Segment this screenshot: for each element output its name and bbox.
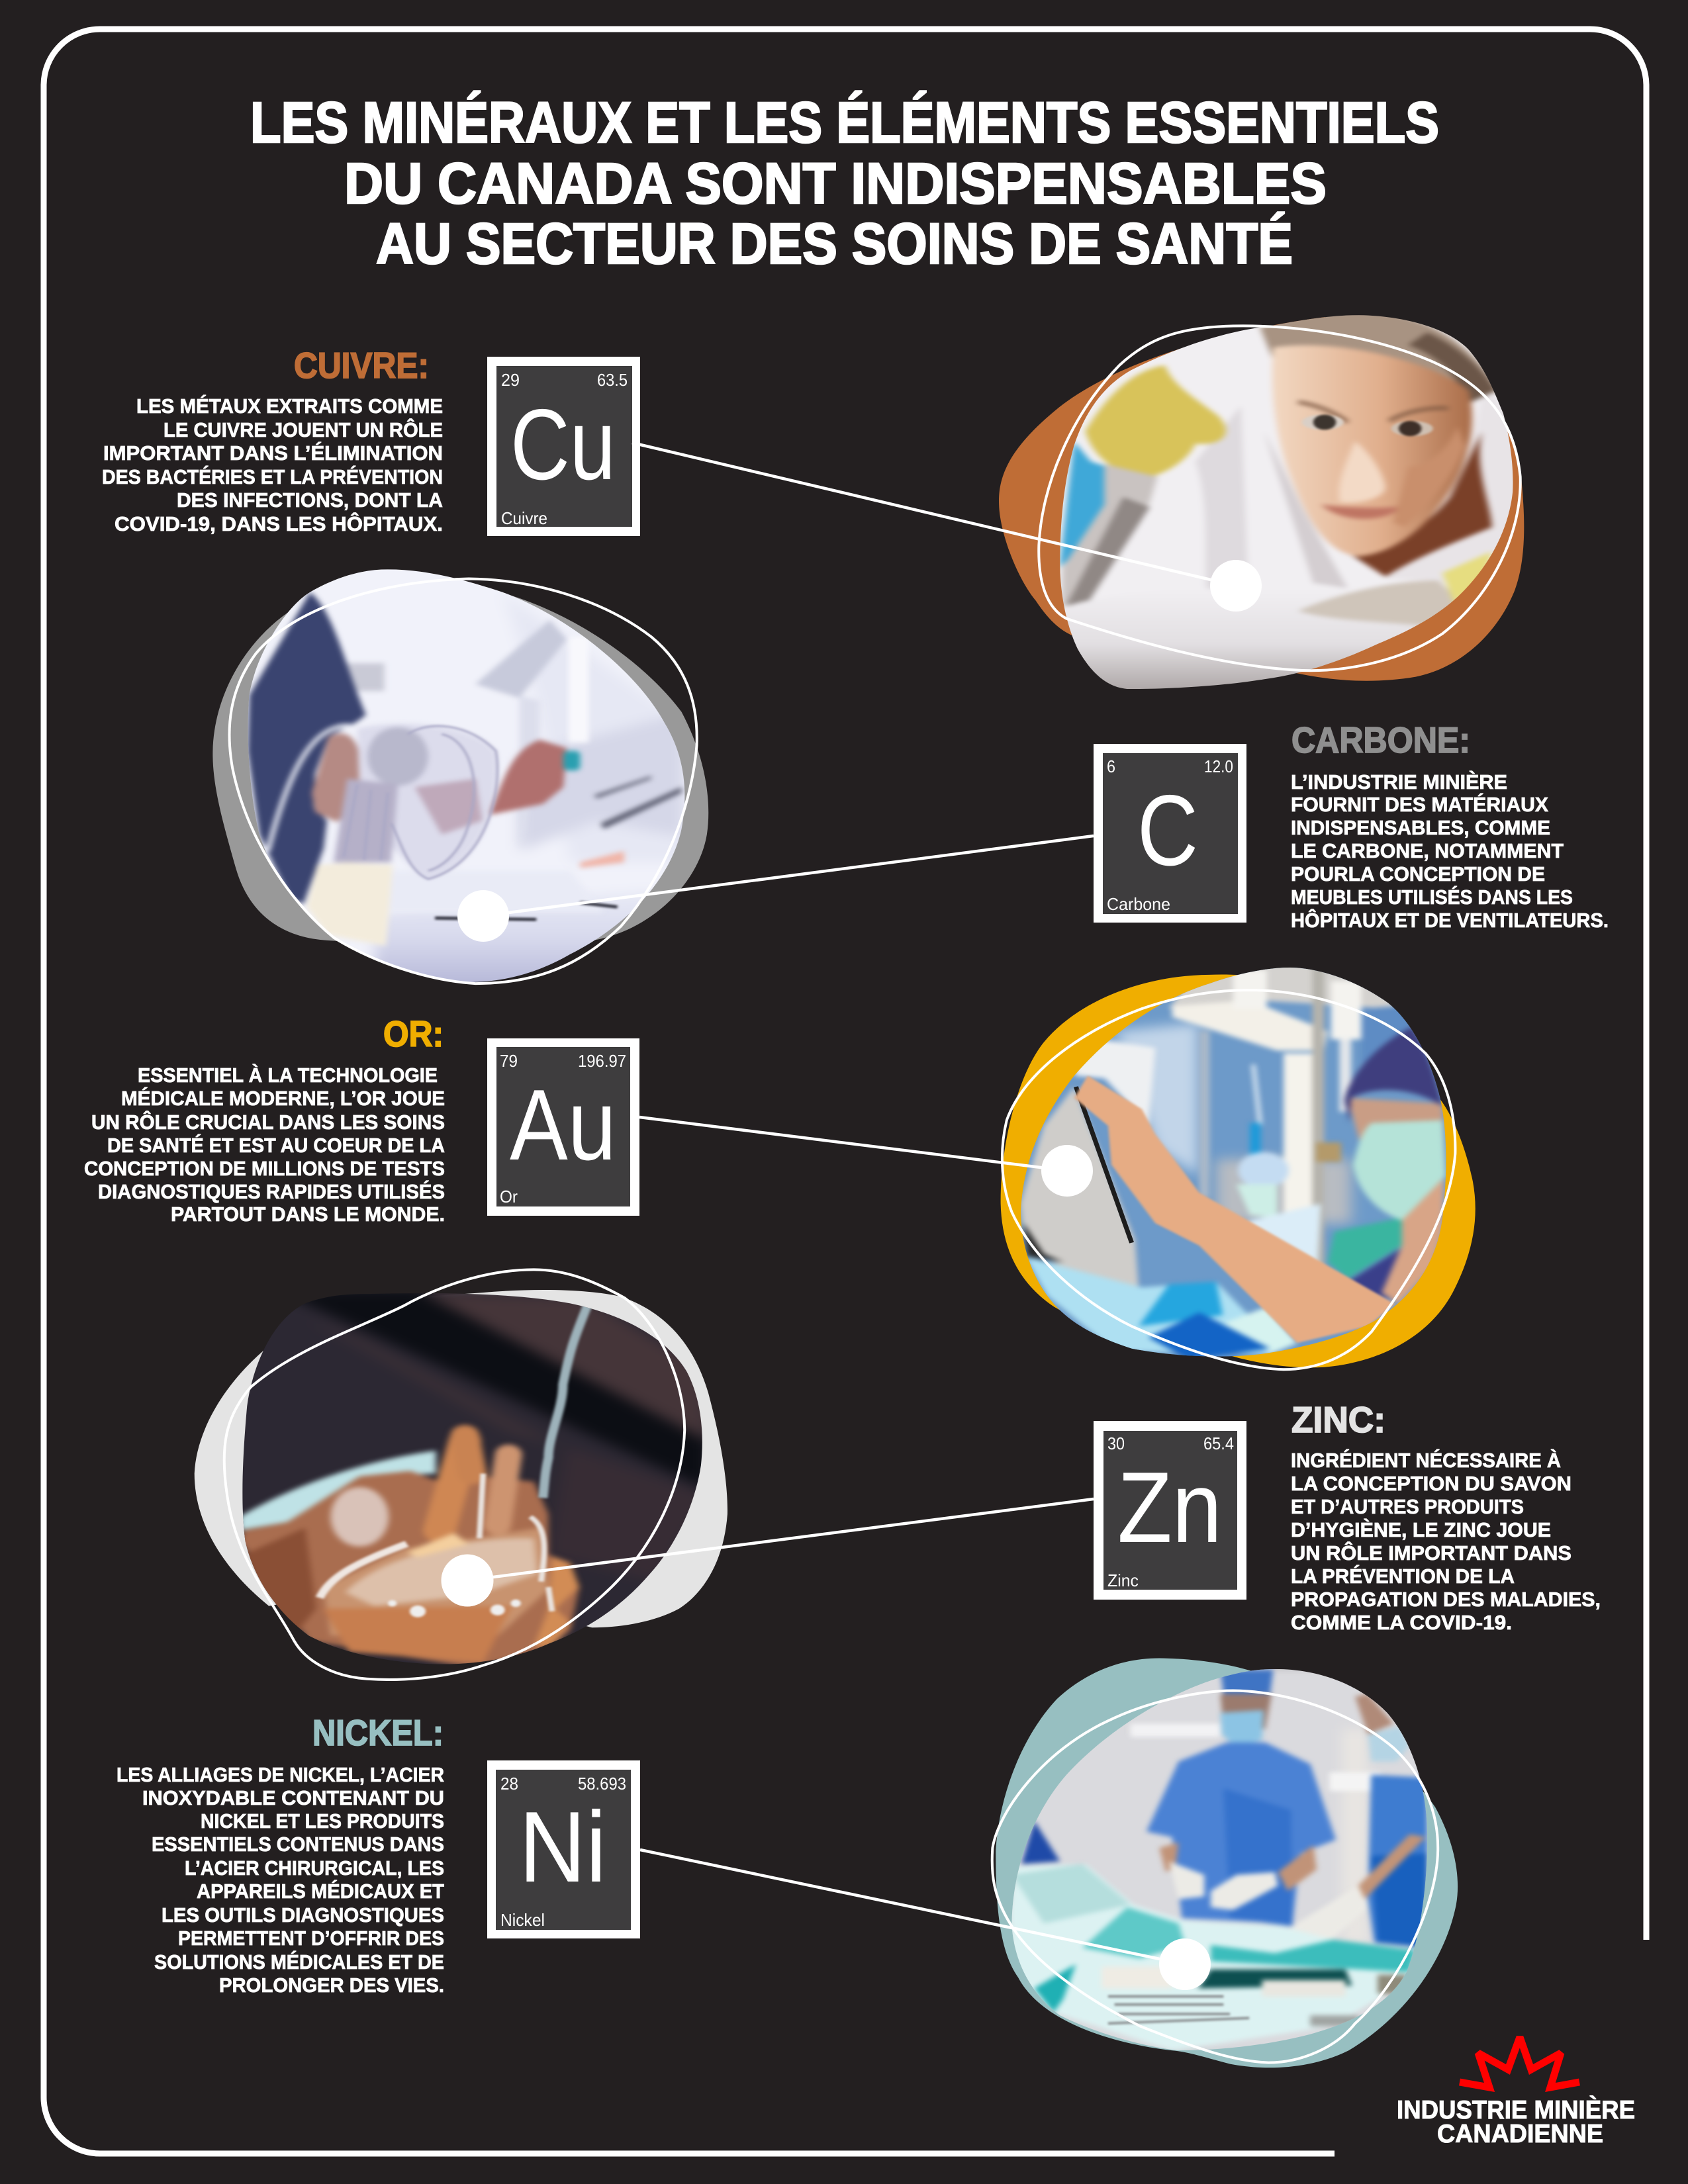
element tile: C: 6 — [1107, 756, 1115, 776]
heading: cuivre: CUIVRE: — [294, 345, 429, 386]
logo wordmark: INDUSTRIE MINIÈRE — [1397, 2095, 1635, 2124]
heading: carbone: CARBONE: — [1291, 719, 1470, 760]
element tile: Ni: 58.693 — [578, 1774, 626, 1794]
text block: zinc: LA CONCEPTION DU SAVON — [1291, 1473, 1571, 1495]
element tile: Zn: 65.4 — [1203, 1433, 1234, 1453]
text block: nickel: PROLONGER DES VIES. — [219, 1974, 444, 1997]
connector: Cu to photo — [632, 443, 1262, 612]
element tile: Cu: 29 — [501, 370, 520, 390]
text block: or — [84, 1064, 445, 1226]
element tile: Cu: Cu — [510, 388, 616, 501]
text block: cuivre: DES INFECTIONS, DONT LA — [177, 489, 443, 512]
text block: carbone: L’INDUSTRIE MINIÈRE — [1291, 770, 1507, 794]
text block: nickel: LES ALLIAGES DE NICKEL, L’ACIER — [117, 1764, 444, 1786]
element tile: Cu: 63.5 — [597, 370, 628, 390]
title — [250, 91, 1439, 276]
panel: copper photo blob — [999, 304, 1530, 700]
text block: carbone: POURLA CONCEPTION DE — [1291, 863, 1545, 886]
text block: zinc: INGRÉDIENT NÉCESSAIRE À — [1291, 1449, 1561, 1472]
text block: cuivre: COVID-19, DANS LES HÔPITAUX. — [115, 512, 443, 535]
text block: cuivre — [102, 394, 443, 535]
text block: or: DE SANTÉ ET EST AU COEUR DE LA — [107, 1134, 445, 1157]
heading: nickel: NICKEL: — [312, 1712, 444, 1753]
panel: cuivre text — [102, 345, 443, 535]
element tile: Au: 196.97 — [578, 1051, 626, 1071]
element tile: C: 12.0 — [1204, 756, 1233, 776]
element tile: Au: Au — [510, 1069, 616, 1181]
white outline shape — [229, 579, 697, 983]
title: LES MINÉRAUX ET LES ÉLÉMENTS ESSENTIELS — [250, 91, 1439, 155]
title: AU SECTEUR DES SOINS DE SANTÉ — [376, 212, 1293, 276]
text block: cuivre: LES MÉTAUX EXTRAITS COMME — [136, 394, 443, 418]
text block: zinc: UN RÔLE IMPORTANT DANS — [1291, 1541, 1571, 1565]
element tile: Cu: Cuivre — [501, 508, 547, 528]
text block: nickel: NICKEL ET LES PRODUITS — [201, 1810, 444, 1833]
text block: zinc: COMME LA COVID-19. — [1291, 1612, 1512, 1634]
white outline shape — [1039, 326, 1521, 670]
text block: nickel: L’ACIER CHIRURGICAL, LES — [185, 1857, 444, 1880]
text block: carbone: MEUBLES UTILISÉS DANS LES — [1291, 886, 1573, 909]
panel: zinc photo blob — [195, 1269, 730, 1680]
element tile: C: C — [1137, 774, 1198, 887]
text block: or: UN RÔLE CRUCIAL DANS LES SOINS — [91, 1110, 445, 1134]
white outline shape — [224, 1269, 684, 1680]
element tile: Au: Or — [500, 1187, 518, 1206]
text block: carbone — [1291, 770, 1609, 932]
light gray backing shape — [195, 1290, 727, 1627]
element tile: Ni: Nickel — [500, 1910, 545, 1930]
text block: carbone: FOURNIT DES MATÉRIAUX — [1291, 793, 1549, 816]
element tile: Au: 79 — [500, 1051, 518, 1071]
panel: or text — [84, 1013, 445, 1226]
element tile: Cu — [487, 357, 640, 536]
photo: woman cleaning surface — [1060, 315, 1513, 689]
text block: cuivre: LE CUIVRE JOUENT UN RÔLE — [164, 418, 443, 441]
text block: nickel: LES OUTILS DIAGNOSTIQUES — [162, 1904, 444, 1927]
title: DU CANADA SONT INDISPENSABLES — [344, 152, 1327, 216]
element tile: Ni: Ni — [519, 1791, 606, 1903]
panel: gold photo blob — [1001, 953, 1476, 1371]
text block: nickel: APPAREILS MÉDICAUX ET — [197, 1880, 444, 1903]
icon: red maple leaf outline — [1460, 2037, 1579, 2087]
text block: zinc: PROPAGATION DES MALADIES, — [1291, 1588, 1601, 1611]
teal backing shape — [996, 1659, 1458, 2068]
connector: C to photo — [457, 836, 1094, 942]
logo wordmark: CANADIENNE — [1437, 2120, 1603, 2148]
text block: nickel — [117, 1764, 444, 1997]
element tile: C — [1094, 744, 1246, 923]
element tile: Zn — [1094, 1421, 1246, 1600]
photo: ventilator mask — [248, 569, 684, 982]
text block: or: PARTOUT DANS LE MONDE. — [171, 1203, 445, 1226]
text block: or: ESSENTIEL À LA TECHNOLOGIE — [138, 1064, 438, 1087]
photo: hand washing — [242, 1293, 702, 1664]
text block: nickel: PERMETTENT D’OFFRIR DES — [178, 1927, 444, 1950]
text block: or: DIAGNOSTIQUES RAPIDES UTILISÉS — [98, 1180, 445, 1203]
gold backing shape — [1001, 975, 1476, 1367]
element tile: Ni: 28 — [500, 1774, 518, 1794]
panel: carbone text — [1291, 719, 1609, 932]
panel: carbon photo blob — [212, 556, 722, 1001]
text block: nickel: ESSENTIELS CONTENUS DANS — [152, 1833, 444, 1856]
element tile: Au — [487, 1038, 639, 1216]
panel: zinc text — [1291, 1399, 1601, 1634]
text block: carbone: HÔPITAUX ET DE VENTILATEURS. — [1291, 908, 1609, 932]
text block: carbone: INDISPENSABLES, COMME — [1291, 817, 1550, 839]
text block: or: CONCEPTION DE MILLIONS DE TESTS — [84, 1158, 445, 1180]
element tile: Zn: Zinc — [1107, 1570, 1139, 1590]
connector: Zn to photo — [441, 1499, 1094, 1607]
text block: zinc: LA PRÉVENTION DE LA — [1291, 1565, 1515, 1588]
text block: zinc: ET D’AUTRES PRODUITS — [1291, 1496, 1524, 1518]
white outline shape — [1002, 990, 1455, 1369]
text block: nickel: INOXYDABLE CONTENANT DU — [142, 1787, 444, 1809]
copper backing shape — [999, 317, 1524, 681]
logo wordmark — [1397, 2095, 1635, 2148]
white outline shape — [992, 1690, 1438, 2063]
text block: zinc — [1291, 1449, 1601, 1634]
text block: cuivre: IMPORTANT DANS L’ÉLIMINATION — [103, 441, 443, 465]
element tile: C: Carbone — [1107, 894, 1170, 914]
heading: zinc: ZINC: — [1291, 1399, 1385, 1440]
photo: surgeons in operating room — [1006, 1661, 1435, 2056]
text block: nickel: SOLUTIONS MÉDICALES ET DE — [154, 1950, 444, 1974]
text block: zinc: D’HYGIÈNE, LE ZINC JOUE — [1291, 1518, 1551, 1541]
connector: Ni to photo — [640, 1850, 1211, 1990]
heading: or: OR: — [383, 1013, 444, 1054]
text block: or: MÉDICALE MODERNE, L’OR JOUE — [121, 1087, 445, 1110]
element tile: Ni — [487, 1760, 640, 1938]
element tile: Zn: 30 — [1107, 1433, 1125, 1453]
panel: nickel photo blob — [992, 1659, 1458, 2068]
photo: nurse at monitor — [1021, 968, 1446, 1357]
logo: Industrie minière canadienne — [1397, 2037, 1635, 2148]
text block: carbone: LE CARBONE, NOTAMMENT — [1291, 840, 1564, 862]
panel: nickel text — [117, 1712, 444, 1997]
connector: Au to photo — [639, 1117, 1093, 1197]
gray backing shape — [212, 580, 708, 944]
element tile: Zn: Zn — [1117, 1451, 1222, 1564]
text block: cuivre: DES BACTÉRIES ET LA PRÉVENTION — [102, 465, 443, 488]
